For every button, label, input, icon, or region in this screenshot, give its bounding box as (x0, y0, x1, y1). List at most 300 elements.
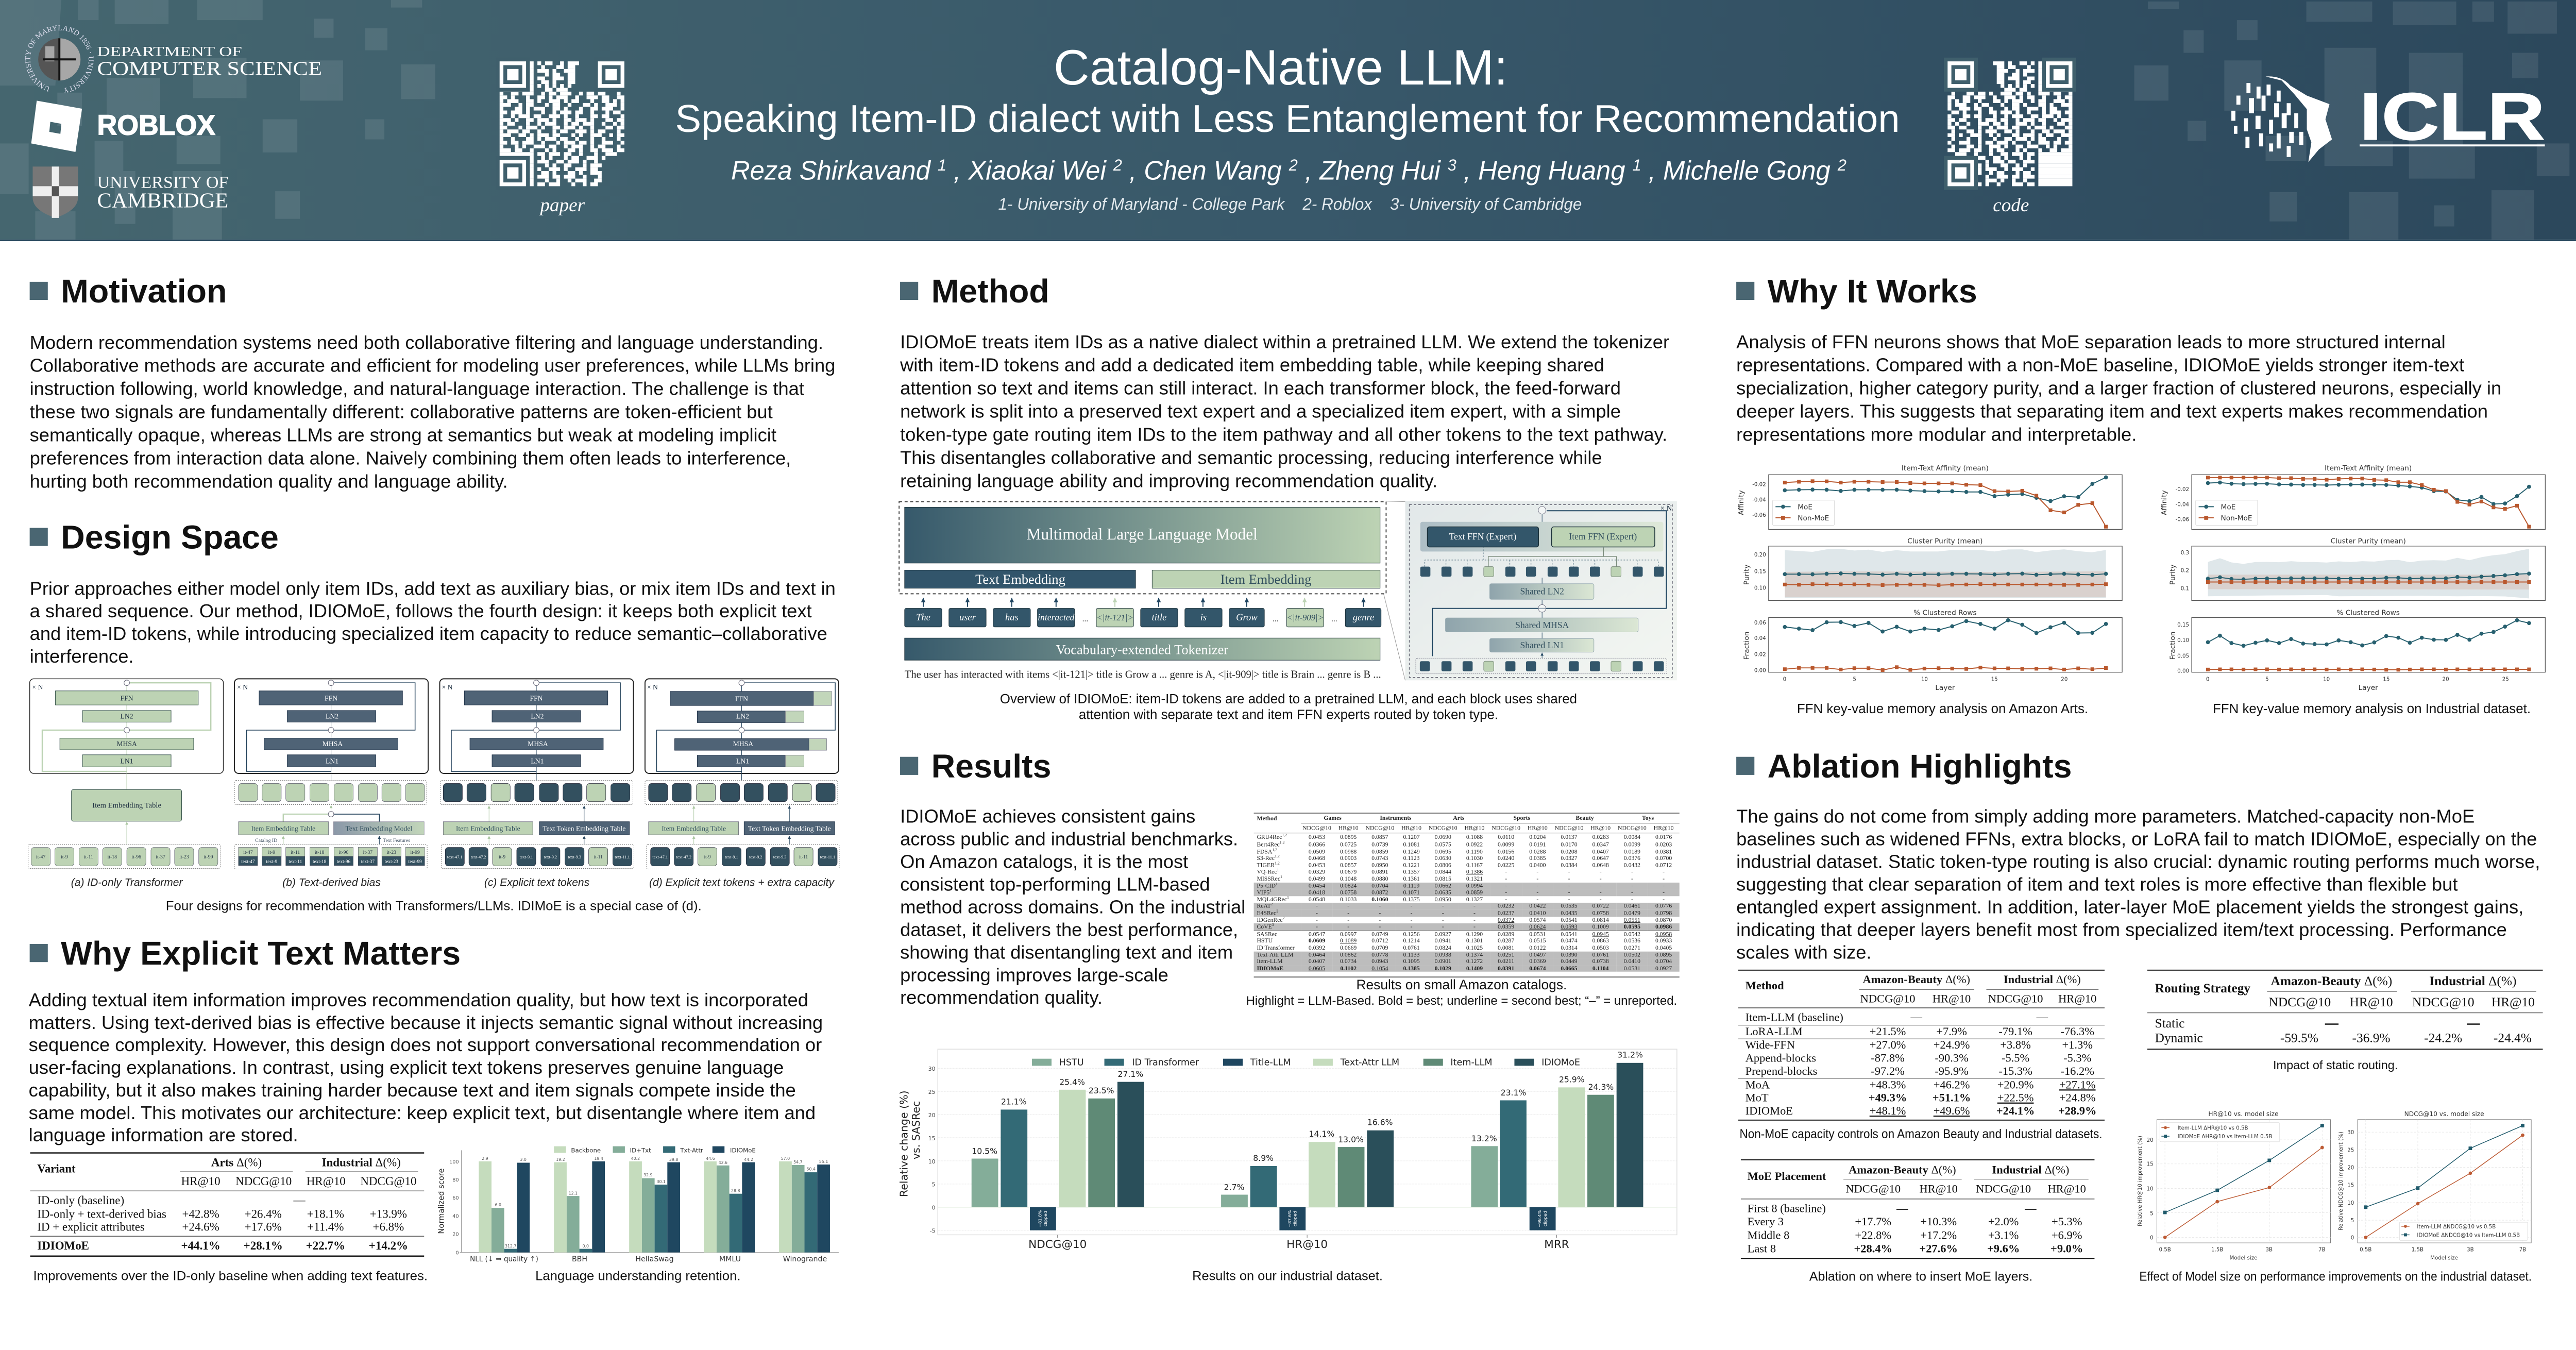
text: Why Explicit Text Matters body: Adding textual item information improves recommendation quality, but how text is incorporated (29, 989, 808, 1010)
table: results on small Amazon catalogs: P5-CID1 (1257, 882, 1278, 889)
table: text feature improvements: +26.4% (245, 1208, 282, 1221)
table: non-MoE capacity controls: -87.8% (1871, 1052, 1905, 1064)
table: MoE placement (1741, 1159, 2094, 1259)
bar chart: results on industrial dataset: NDCG@10 (1028, 1238, 1087, 1251)
bar chart: language understanding retention: 60 (452, 1195, 459, 1201)
text: Why It Works body: representations more modular and interpretable. (1736, 424, 2137, 445)
table: results on small Amazon catalogs: 0.0541 (1561, 930, 1578, 937)
table: results on small Amazon catalogs: - (1347, 909, 1349, 916)
panel: (a) ID-only Transformer: it-99 (204, 854, 213, 860)
text: Why Explicit Text Matters body: language information are stored. (29, 1124, 298, 1145)
panel: (a) ID-only Transformer: FFN (121, 695, 133, 702)
panel: transformer block zoom-in: Item FFN (Expert) (1569, 531, 1637, 542)
chart: Amazon Arts panels: 0.20 (1754, 552, 1766, 558)
table: results on small Amazon catalogs: 0.0497 (1529, 951, 1546, 958)
bar chart: results on industrial dataset: -5 (930, 1228, 935, 1235)
table: results on small Amazon catalogs: - (1379, 923, 1381, 930)
table: results on small Amazon catalogs: 0.0289 (1498, 930, 1514, 937)
table: non-MoE capacity controls: +27.0% (1870, 1039, 1906, 1051)
table: results on small Amazon catalogs: 0.0449 (1561, 957, 1578, 965)
panel: (d) Explicit text tokens + extra capacity: × N (647, 684, 658, 691)
table: non-MoE capacity controls: +24.8% (2059, 1091, 2096, 1104)
table: results on small Amazon catalogs: 0.0669 (1340, 944, 1357, 951)
table: results on small Amazon catalogs: IDGenRec2 (1257, 916, 1284, 923)
bar chart: language understanding retention (437, 1146, 839, 1263)
panel: multimodal LLM stack: Text Embedding (975, 571, 1065, 587)
bar chart: results on industrial dataset: 30 (928, 1066, 935, 1072)
table: routing strategy: -24.4% (2494, 1031, 2532, 1045)
bar chart: language understanding retention: 2.9 (482, 1156, 488, 1161)
table: non-MoE capacity controls: — (1910, 1010, 1923, 1023)
line chart: NDCG@10 vs model size: 3B (2467, 1247, 2474, 1253)
panel: (d) Explicit text tokens + extra capacity: text-11.1 (820, 854, 835, 859)
table: results on small Amazon catalogs: 0.1207 (1403, 833, 1420, 840)
table: MoE placement: Middle 8 (1748, 1229, 1789, 1241)
panel: (b) Text-derived bias: × N (237, 684, 248, 691)
table: results on small Amazon catalogs: 0.1095 (1403, 957, 1420, 965)
chart: Industrial dataset panels: -0.04 (2175, 502, 2189, 508)
legend (1032, 1057, 1580, 1068)
table: results on small Amazon catalogs: ID Transformer (1257, 944, 1295, 951)
chart: Amazon Arts panels: 0.02 (1754, 652, 1766, 657)
line chart: HR@10 vs model size: IDIOMoE ΔHR@10 vs Item-LLM 0.5B (2178, 1134, 2272, 1140)
table: results on small Amazon catalogs: 0.0372 (1498, 916, 1514, 923)
bar chart: results on industrial dataset: 31.2% (1617, 1050, 1643, 1060)
table: results on small Amazon catalogs: - (1600, 868, 1602, 875)
text: Why Explicit Text Matters body: user-facing explanations. In contrast, using explicit text tokens preserves genuine language (29, 1057, 784, 1078)
bar chart: language understanding retention: 6.0 (495, 1203, 501, 1207)
text: Why It Works body: Analysis of FFN neurons shows that MoE separation leads to more structured internal (1736, 331, 2446, 352)
panel: (b) Text-derived bias: it-9 (268, 850, 275, 855)
chart: Industrial dataset panels: 10 (2323, 676, 2330, 682)
token row: interacted (1038, 612, 1075, 622)
table: non-MoE capacity controls: Item-LLM (baseline) (1745, 1011, 1843, 1023)
table: results on small Amazon catalogs: 0.1071 (1403, 889, 1420, 896)
logo: Roblox: ROBLOX (97, 109, 215, 141)
table: results on small Amazon catalogs: - (1505, 868, 1507, 875)
chart: Industrial dataset panels: Affinity (2160, 490, 2168, 515)
table: results on small Amazon catalogs: 0.0551 (1624, 916, 1640, 923)
panel: (a) ID-only Transformer: MHSA (116, 741, 138, 748)
table: results on small Amazon catalogs: - (1663, 882, 1665, 889)
decorative overlay rectangles (0, 0, 2569, 240)
bar chart: results on industrial dataset: 15 (928, 1135, 935, 1142)
text: Ablation Highlights body: baselines such as widened FFNs, extra blocks, or LoRA fail to match IDIOMoE, especially on the (1736, 828, 2537, 849)
panel: (b) Text-derived bias: LN1 (326, 758, 338, 765)
chart: Industrial dataset panels: Purity (2169, 564, 2177, 585)
text: Results body: processing improves large-scale (900, 964, 1168, 985)
line chart: NDCG@10 vs model size: 10 (2347, 1200, 2354, 1206)
table: results on small Amazon catalogs: NDCG@10 (1366, 824, 1394, 831)
table: results on small Amazon catalogs: - (1663, 896, 1665, 903)
table: routing strategy: Dynamic (2155, 1031, 2203, 1045)
table: results on small Amazon catalogs: 0.0870 (1655, 916, 1672, 923)
table: results on small Amazon catalogs: 0.0862 (1340, 951, 1357, 958)
text: Results body: across public and industrial benchmarks. (900, 828, 1238, 849)
label: code: code (1993, 195, 2029, 216)
table: results on small Amazon catalogs: 0.0758 (1592, 909, 1609, 916)
table: results on small Amazon catalogs: 0.0474 (1561, 937, 1578, 944)
panel: (a) ID-only Transformer: it-96 (131, 854, 141, 860)
bar chart: language understanding retention: 32.9 (643, 1173, 653, 1177)
table: non-MoE capacity controls: Append-blocks (1745, 1052, 1816, 1064)
text: Why It Works body (1736, 330, 2541, 446)
chart: Amazon Arts panels: 0.10 (1754, 585, 1766, 591)
panel: (a) ID-only Transformer: it-37 (156, 854, 165, 860)
panel: transformer block zoom-in: × N (1660, 504, 1672, 513)
table: text feature improvements: +11.4% (307, 1221, 344, 1234)
table: results on small Amazon catalogs: FDSA1,2 (1257, 847, 1277, 855)
heading: Why Explicit Text Matters: Why Explicit Text Matters (61, 934, 461, 972)
line chart: NDCG@10 vs model size: 0 (2351, 1235, 2354, 1241)
panel: transformer block zoom-in: Text FFN (Expert) (1449, 531, 1516, 542)
panel: (c) Explicit text tokens: text-9.3 (568, 854, 581, 859)
table: results on small Amazon catalogs: 0.1088 (1466, 833, 1483, 840)
line chart: NDCG@10 vs model size: Item-LLM ΔNDCG@10 vs 0.5B (2417, 1224, 2496, 1230)
table: results on small Amazon catalogs: 0.1256 (1403, 930, 1420, 937)
panel: (c) Explicit text tokens: × N (442, 684, 452, 691)
table: results on small Amazon catalogs: 0.1081 (1403, 841, 1420, 848)
table: results on small Amazon catalogs: 0.0695 (1435, 848, 1451, 855)
table: non-MoE capacity controls: -95.9% (1935, 1065, 1969, 1077)
logo: University of Cambridge: UNIVERSITY OF (97, 173, 228, 192)
table: text feature improvements: +28.1% (244, 1239, 283, 1253)
table: results on small Amazon catalogs: 0.1190 (1466, 848, 1483, 855)
bar chart: results on industrial dataset: 20 (928, 1112, 935, 1119)
bar chart: language understanding retention: 54.7 (793, 1160, 803, 1165)
table: results on small Amazon catalogs: 0.1089 (1340, 937, 1357, 944)
table: results on small Amazon catalogs: 0.0806 (1435, 862, 1451, 868)
token row: Grow (1236, 612, 1258, 623)
table: results on small Amazon catalogs: 0.0392 (1309, 944, 1325, 951)
caption: architecture overview: Overview of IDIOMoE: item-ID tokens are added to a pretrained LLM, and each block uses shared (1000, 691, 1577, 706)
authors: 2 (1113, 156, 1122, 174)
chart: Amazon Arts panels: 0.00 (1754, 668, 1766, 674)
figure: IDIOMoE architecture overview (899, 501, 1677, 722)
table: results on small Amazon catalogs: 0.0410 (1529, 909, 1546, 916)
panel: (c) Explicit text tokens: text-9.1 (520, 854, 533, 859)
table: non-MoE capacity controls: +7.9% (1936, 1025, 1967, 1038)
table: results on small Amazon catalogs: 0.0232 (1498, 902, 1514, 909)
table: routing strategy: -24.2% (2424, 1031, 2462, 1045)
panel: (b) Text-derived bias (234, 679, 428, 869)
text: Motivation body: semantically opaque, whereas LLMs are strong at semantics but weak at modeling implicit (30, 424, 776, 445)
table: results on small Amazon catalogs: 0.1029 (1435, 965, 1451, 971)
panel: (b) Text-derived bias: Text Features (383, 838, 410, 843)
table: text feature improvements: ID + explicit attributes (37, 1221, 145, 1234)
bar chart: results on industrial dataset: 5 (932, 1182, 935, 1188)
panel: (a) ID-only Transformer: it-9 (61, 854, 68, 860)
caption: results on small Amazon catalogs: Results on small Amazon catalogs. (1356, 977, 1567, 992)
table: results on small Amazon catalogs: Bert4Rec1,2 (1257, 840, 1284, 848)
chart: Industrial dataset panels: Non-MoE (2221, 514, 2252, 522)
heading: Results: Results (931, 747, 1051, 784)
panel: transformer block zoom-in (1405, 501, 1677, 680)
table: text feature improvements: Arts Δ(%) (211, 1156, 262, 1170)
table: routing strategy (2147, 970, 2543, 1050)
panel: (a) ID-only Transformer: it-11 (84, 854, 93, 860)
text: Results body: method across domains. On the industrial (900, 896, 1245, 917)
table: results on small Amazon catalogs: 0.0359 (1498, 923, 1514, 930)
chart: Industrial dataset panels: 0.2 (2181, 568, 2189, 573)
table: results on small Amazon catalogs: 0.1214 (1403, 937, 1420, 944)
table: results on small Amazon catalogs: 0.0502 (1624, 951, 1640, 958)
bar chart: results on industrial dataset: clipped (1543, 1211, 1548, 1226)
table: results on small Amazon catalogs: 0.0674 (1529, 965, 1546, 971)
panel: (b) Text-derived bias: it-47 (243, 850, 253, 855)
table: results on small Amazon catalogs: 0.0385 (1529, 854, 1546, 862)
panel: (c) Explicit text tokens: text-47.2 (471, 854, 486, 859)
table: results on small Amazon catalogs: 0.0758 (1340, 889, 1357, 896)
panel: (b) Text-derived bias: text-99 (409, 859, 422, 865)
table: results on small Amazon catalogs: - (1663, 889, 1665, 896)
table: results on small Amazon catalogs: NDCG@10 (1555, 824, 1583, 831)
text: Method body: retaining language ability and improving recommendation quality. (900, 470, 1437, 491)
table: results on small Amazon catalogs: 0.1104 (1592, 965, 1609, 971)
bar chart: results on industrial dataset: 21.1% (1001, 1097, 1027, 1106)
panel: (a) ID-only Transformer: LN1 (121, 758, 133, 765)
table: results on small Amazon catalogs: 0.0271 (1624, 944, 1640, 951)
line chart: HR@10 vs model size: 20 (2147, 1137, 2154, 1143)
table: results on small Amazon catalogs: 0.0283 (1592, 833, 1609, 840)
table: MoE placement: +28.4% (1854, 1242, 1892, 1255)
table: results on small Amazon catalogs: - (1473, 902, 1476, 909)
chart: Amazon Arts panels: 0.15 (1754, 569, 1766, 575)
table: results on small Amazon catalogs: - (1505, 889, 1507, 896)
chart: Industrial dataset panels: 0.10 (2177, 637, 2189, 644)
bar chart: language understanding retention: Normalized score (437, 1169, 446, 1234)
table: results on small Amazon catalogs: 0.1374 (1466, 951, 1483, 958)
ablation figures (1731, 956, 2576, 1298)
panel: multimodal LLM stack (899, 502, 1386, 594)
table: MoE placement: MoE Placement (1748, 1170, 1826, 1183)
table: results on small Amazon catalogs: 0.0595 (1624, 923, 1640, 930)
chart: Industrial dataset panels: 0.1 (2181, 586, 2189, 592)
table: results on small Amazon catalogs: 0.0422 (1529, 902, 1546, 909)
text: Results body: IDIOMoE achieves consistent gains (900, 805, 1195, 826)
table: non-MoE capacity controls: -76.3% (2060, 1025, 2094, 1038)
table: text feature improvements (30, 1152, 424, 1257)
chart: Amazon Arts panels: 0.06 (1754, 620, 1766, 626)
table: results on small Amazon catalogs: VQ-Rec1 (1257, 868, 1279, 875)
panel: (b) Text-derived bias: LN2 (326, 713, 338, 720)
table: results on small Amazon catalogs: 0.0432 (1624, 862, 1640, 868)
table: non-MoE capacity controls: Method (1745, 979, 1784, 992)
bar chart: language understanding retention: Txt-Attr (680, 1147, 703, 1154)
table: results on small Amazon catalogs: 0.1385 (1403, 965, 1420, 971)
chart: Industrial dataset panels: 20 (2443, 676, 2449, 682)
table: results on small Amazon catalogs: 0.1123 (1403, 854, 1419, 862)
chart: Amazon Arts panels: Layer (1935, 684, 1955, 692)
table: non-MoE capacity controls: Wide-FFN (1745, 1039, 1795, 1051)
table: results on small Amazon catalogs: 0.0541 (1561, 916, 1578, 923)
table: results on small Amazon catalogs: TIGER1,2 (1257, 861, 1280, 868)
line chart: HR@10 vs model size: 0.5B (2159, 1247, 2171, 1253)
heading: Method: Method (931, 272, 1049, 310)
table: results on small Amazon catalogs: - (1379, 916, 1381, 923)
table: non-MoE capacity controls: +28.9% (2058, 1105, 2097, 1117)
line chart: NDCG@10 vs model size: 1.5B (2412, 1247, 2424, 1253)
logo: University of Maryland Computer Science: COMPUTER SCIENCE (97, 58, 322, 79)
table: MoE placement: Amazon-Beauty Δ(%) (1849, 1163, 1956, 1176)
chart: Amazon Arts panels: -0.06 (1752, 512, 1766, 518)
line chart: HR@10 vs model size: 5 (2150, 1211, 2154, 1217)
table: results on small Amazon catalogs: 0.0418 (1309, 889, 1325, 896)
panel: transformer block zoom-in: Shared MHSA (1515, 620, 1569, 630)
table: MoE placement: +9.0% (2050, 1242, 2083, 1255)
table: MoE placement: +6.9% (2052, 1229, 2082, 1241)
bar chart: results on industrial dataset: 23.1% (1501, 1088, 1526, 1098)
line chart: HR@10 vs model size: 0 (2150, 1235, 2154, 1241)
table: results on small Amazon catalogs: IDIOMoE (1257, 965, 1283, 971)
table: routing strategy: NDCG@10 (2412, 995, 2475, 1009)
bar chart: language understanding retention: 80 (452, 1177, 459, 1183)
table: results on small Amazon catalogs: - (1663, 868, 1665, 875)
table: results on small Amazon catalogs: - (1379, 909, 1381, 916)
table: MoE placement: +27.6% (1919, 1242, 1958, 1255)
panel: (c) Explicit text tokens: MHSA (528, 741, 549, 748)
table: results on small Amazon catalogs: 0.0575 (1435, 841, 1451, 848)
table: non-MoE capacity controls: +51.1% (1933, 1091, 1971, 1104)
text: Motivation body: these two signals are fundamentally different: collaborative patterns are token-efficient but (30, 401, 773, 422)
chart: Industrial dataset panels: % Clustered Rows (2336, 609, 2400, 617)
table: results on small Amazon catalogs: Beauty (1576, 815, 1594, 821)
bar chart: results on industrial dataset: −87.6% (1287, 1210, 1293, 1227)
table: results on small Amazon catalogs: 0.1272 (1466, 957, 1483, 965)
line chart: NDCG@10 vs model size: 7B (2519, 1247, 2526, 1253)
table: results on small Amazon catalogs: 0.0635 (1435, 889, 1451, 896)
table: non-MoE capacity controls: +49.3% (1869, 1091, 1907, 1104)
bar chart: language understanding retention: 39.8 (669, 1157, 678, 1162)
legend: Item-LLM (1450, 1057, 1493, 1068)
table: results on small Amazon catalogs: - (1536, 882, 1538, 889)
table: results on small Amazon catalogs: 0.0503 (1592, 944, 1609, 951)
table: results on small Amazon catalogs: 0.0515 (1529, 937, 1546, 944)
table: results on small Amazon catalogs: - (1347, 902, 1349, 909)
logo: ICLR (2231, 76, 2545, 162)
line chart: HR@10 vs model size: 7B (2318, 1247, 2326, 1253)
table: routing strategy: NDCG@10 (2269, 995, 2331, 1009)
table: results on small Amazon catalogs: 0.0922 (1466, 841, 1483, 848)
table: results on small Amazon catalogs: 0.1290 (1466, 930, 1483, 937)
bar chart: language understanding retention: 44.6 (706, 1156, 715, 1161)
chart: Industrial dataset panels: 0.05 (2177, 653, 2189, 659)
authors: , Heng Huang (1456, 156, 1633, 185)
table: results on small Amazon catalogs: 0.0988 (1340, 848, 1357, 855)
bar chart: language understanding retention: 20 (452, 1232, 459, 1237)
table: results on small Amazon catalogs: 0.1221 (1403, 862, 1420, 868)
logo: University of Cambridge (32, 166, 228, 218)
caption: architecture overview (1000, 691, 1577, 722)
token row: <|it-909|> (1287, 613, 1324, 622)
table: results on small Amazon catalogs: 0.0347 (1592, 841, 1609, 848)
table: results on small Amazon catalogs: 0.1025 (1466, 944, 1483, 951)
table: results on small Amazon catalogs: 0.0314 (1561, 944, 1578, 951)
legend: IDIOMoE (1541, 1057, 1580, 1068)
chart: Amazon Arts panels: Affinity (1737, 490, 1745, 515)
bar chart: results on industrial dataset: 10.5% (972, 1146, 997, 1156)
table: results on small Amazon catalogs: 0.0958 (1655, 930, 1672, 937)
table: non-MoE capacity controls: Amazon-Beauty Δ(%) (1862, 973, 1970, 986)
text: Motivation body: preferences from interaction data alone. Naively combining them often leads to interference, (30, 447, 791, 468)
table: text feature improvements: HR@10 (181, 1175, 221, 1188)
table: results on small Amazon catalogs: HR@10 (1654, 824, 1674, 831)
chart: Industrial dataset panels: 0.15 (2177, 622, 2189, 628)
chart: Amazon Arts panels: -0.02 (1752, 482, 1766, 487)
table: MoE placement: — (2024, 1202, 2037, 1214)
chart: Amazon Arts panels: Purity (1743, 564, 1751, 585)
table: results on small Amazon catalogs: 0.0857 (1371, 833, 1388, 840)
table: results on small Amazon catalogs: 0.0461 (1624, 902, 1640, 909)
figure: FFN key-value memory analysis (1726, 458, 2576, 724)
table: non-MoE capacity controls: NDCG@10 (1988, 992, 2043, 1005)
table: routing strategy: Routing Strategy (2155, 981, 2250, 995)
table: results on small Amazon catalogs: 0.0535 (1561, 902, 1578, 909)
panel: (b) Text-derived bias: text-96 (337, 859, 350, 865)
table: MoE placement: HR@10 (2048, 1183, 2086, 1195)
panel: multimodal LLM stack: Multimodal Large Language Model (1027, 525, 1258, 543)
chart: Industrial dataset panels: 0.3 (2181, 550, 2189, 556)
table: results on small Amazon catalogs: 0.0859 (1371, 848, 1388, 855)
caption: industrial results: Results on our industrial dataset. (1192, 1268, 1383, 1283)
table: results on small Amazon catalogs: 0.0593 (1561, 923, 1578, 930)
panel: (a) ID-only Transformer: × N (32, 684, 43, 691)
table: results on small Amazon catalogs: Instruments (1380, 815, 1412, 821)
panel: (c) Explicit text tokens: LN1 (531, 758, 544, 765)
captions: subfigure labels (71, 876, 835, 889)
table: results on small Amazon catalogs: GRU4Rec1,2 (1257, 833, 1287, 840)
table: non-MoE capacity controls: NDCG@10 (1860, 992, 1915, 1005)
chart: Amazon Arts panels: 0 (1783, 676, 1786, 682)
text: Why It Works body: deeper layers. This suggests that separating item and text experts makes recommendation (1736, 400, 2488, 421)
table: results on small Amazon catalogs: 0.0776 (1655, 902, 1672, 909)
authors: Reza Shirkavand (731, 156, 934, 185)
table: results on small Amazon catalogs: 0.0738 (1592, 957, 1609, 965)
logo: University of Cambridge: CAMBRIDGE (97, 189, 228, 212)
text: Results body: On Amazon catalogs, it is the most (900, 851, 1188, 872)
table: results on small Amazon catalogs: 0.1167 (1466, 862, 1483, 868)
text: Ablation Highlights body: industrial dataset. Static token-type routing is also crucial: dynamic routing performs much worse, (1736, 851, 2540, 872)
table: non-MoE capacity controls: -90.3% (1935, 1052, 1969, 1064)
chart: Industrial dataset panels: MoE (2221, 503, 2235, 511)
table: routing strategy: Amazon-Beauty Δ(%) (2271, 974, 2392, 988)
line chart: NDCG@10 vs model size: 5 (2351, 1218, 2354, 1224)
bar chart: results on industrial dataset: 24.3% (1588, 1083, 1614, 1092)
panel: (a) ID-only Transformer: Item Embedding Table (92, 802, 161, 809)
table: results on small Amazon catalogs: 0.0110 (1498, 833, 1514, 840)
logo: ICLR: ICLR (2360, 79, 2545, 154)
chart: Industrial dataset panels: -0.02 (2175, 486, 2189, 493)
chart: Amazon Arts panels: 15 (1991, 676, 1998, 682)
bar chart: results on industrial dataset: 25.9% (1559, 1075, 1585, 1084)
bar chart: language understanding retention: MMLU (719, 1256, 741, 1263)
panel: (b) Text-derived bias: Text Embedding Model (346, 825, 412, 833)
panel: (d) Explicit text tokens + extra capacity: text-9.3 (773, 854, 786, 859)
chart: Industrial dataset panels: 15 (2383, 676, 2389, 682)
text: Design Space body: a shared sequence. Our method, IDIOMoE, follows the fourth design: it keeps both explicit text (30, 600, 812, 621)
caption: results on small Amazon catalogs (1246, 977, 1677, 1008)
table: results on small Amazon catalogs: SASRec (1257, 930, 1277, 937)
table: results on small Amazon catalogs: NDCG@10 (1429, 824, 1458, 831)
table: results on small Amazon catalogs: HR@10 (1528, 824, 1548, 831)
table: results on small Amazon catalogs: 0.0624 (1529, 923, 1546, 930)
table: results on small Amazon catalogs: - (1536, 868, 1538, 875)
bar chart: language understanding retention: 3.0 (520, 1157, 527, 1162)
caption: routing: Impact of static routing. (2273, 1059, 2398, 1072)
table: results on small Amazon catalogs: 0.0648 (1592, 862, 1609, 868)
table: results on small Amazon catalogs: 0.0933 (1655, 937, 1672, 944)
authors: 3 (1448, 156, 1456, 174)
